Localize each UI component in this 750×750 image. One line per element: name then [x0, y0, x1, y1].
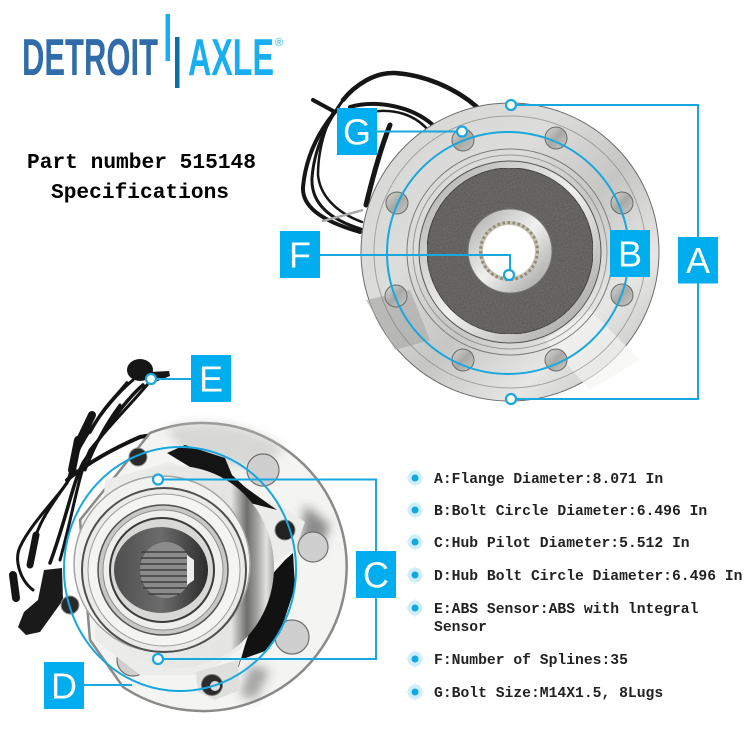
dark rotor disc [427, 168, 593, 334]
dimension E leader [156, 378, 192, 380]
spec A: A:Flange Diameter:8.071 In [434, 472, 663, 488]
lower lug with hole [196, 660, 240, 700]
badge F: F [289, 234, 311, 276]
splined bore [479, 221, 539, 281]
spec B: B:Bolt Circle Diameter:6.496 In [434, 504, 707, 520]
spec E: Sensor [434, 620, 487, 636]
dark wedge behind knuckle [232, 553, 295, 690]
title: Part number 515148 [27, 151, 256, 175]
dark shadow under cable [167, 445, 277, 510]
dimension D leader [83, 684, 132, 686]
knuckle body [95, 462, 305, 675]
wiring connector [18, 568, 63, 635]
dimension C bracket [163, 480, 376, 659]
badge F [280, 231, 320, 278]
center collar [468, 209, 552, 293]
badge G [337, 108, 377, 155]
logo: Detroit Axle [22, 14, 283, 88]
inner splines [140, 542, 194, 598]
logo bar: upper [166, 14, 170, 61]
dimension F leader [319, 255, 510, 271]
badge B [610, 230, 650, 277]
bearing rings [74, 476, 250, 652]
spec D: D:Hub Bolt Circle Diameter:6.496 In [434, 569, 742, 585]
dimension annotations [64, 100, 698, 691]
spec E: E:ABS Sensor:ABS with lntegral [434, 602, 699, 618]
flange soft shadows [240, 505, 330, 700]
title: Specifications [51, 181, 229, 205]
flange [361, 103, 659, 401]
bolt holes [117, 454, 328, 676]
dimension B bolt circle [387, 132, 629, 374]
dimension A bracket [516, 105, 698, 399]
knuckle lug hole [275, 520, 295, 540]
flange rings [374, 116, 646, 388]
center bore [114, 527, 208, 613]
anchor dots [146, 100, 516, 664]
flange grey top tone [165, 423, 285, 470]
badge C [356, 551, 396, 598]
flange [80, 423, 347, 711]
badge A: A [686, 240, 710, 281]
badge E [191, 355, 231, 402]
sensor harness [13, 380, 227, 598]
flange highlights [366, 290, 640, 390]
logo bar: lower [175, 37, 180, 88]
badge A [678, 237, 718, 284]
spec F: F:Number of Splines:35 [434, 653, 628, 669]
title [27, 151, 256, 205]
badge G: G [343, 112, 371, 152]
spec G: G:Bolt Size:M14X1.5, 8Lugs [434, 686, 663, 702]
illustration: bottom wheel hub (bearing side) [13, 359, 347, 711]
badge D [44, 662, 84, 709]
spec C: C:Hub Pilot Diameter:5.512 In [434, 536, 690, 552]
logo word: AXLE: AXLE [188, 29, 274, 87]
sensor wires [303, 73, 477, 232]
badge E: E [199, 358, 223, 400]
bearing housing cylinder [80, 466, 274, 668]
badge D: D [51, 666, 77, 706]
bright raised hub ring [419, 161, 601, 343]
bullet icons [406, 469, 424, 701]
logo word: DETROIT: DETROIT [22, 29, 158, 87]
left lug holes [61, 448, 147, 614]
spec E [434, 602, 699, 636]
dimension G leader [376, 130, 458, 132]
badge B: B [618, 234, 642, 274]
dimension D hub bolt circle [64, 447, 296, 691]
sensor head [127, 359, 170, 382]
illustration: top wheel hub (flange side) [303, 73, 659, 401]
wheel studs [385, 127, 633, 371]
logo registered mark: ® [275, 37, 283, 49]
letter badges [44, 108, 718, 709]
specification list [406, 469, 742, 702]
badge C: C [363, 554, 389, 596]
